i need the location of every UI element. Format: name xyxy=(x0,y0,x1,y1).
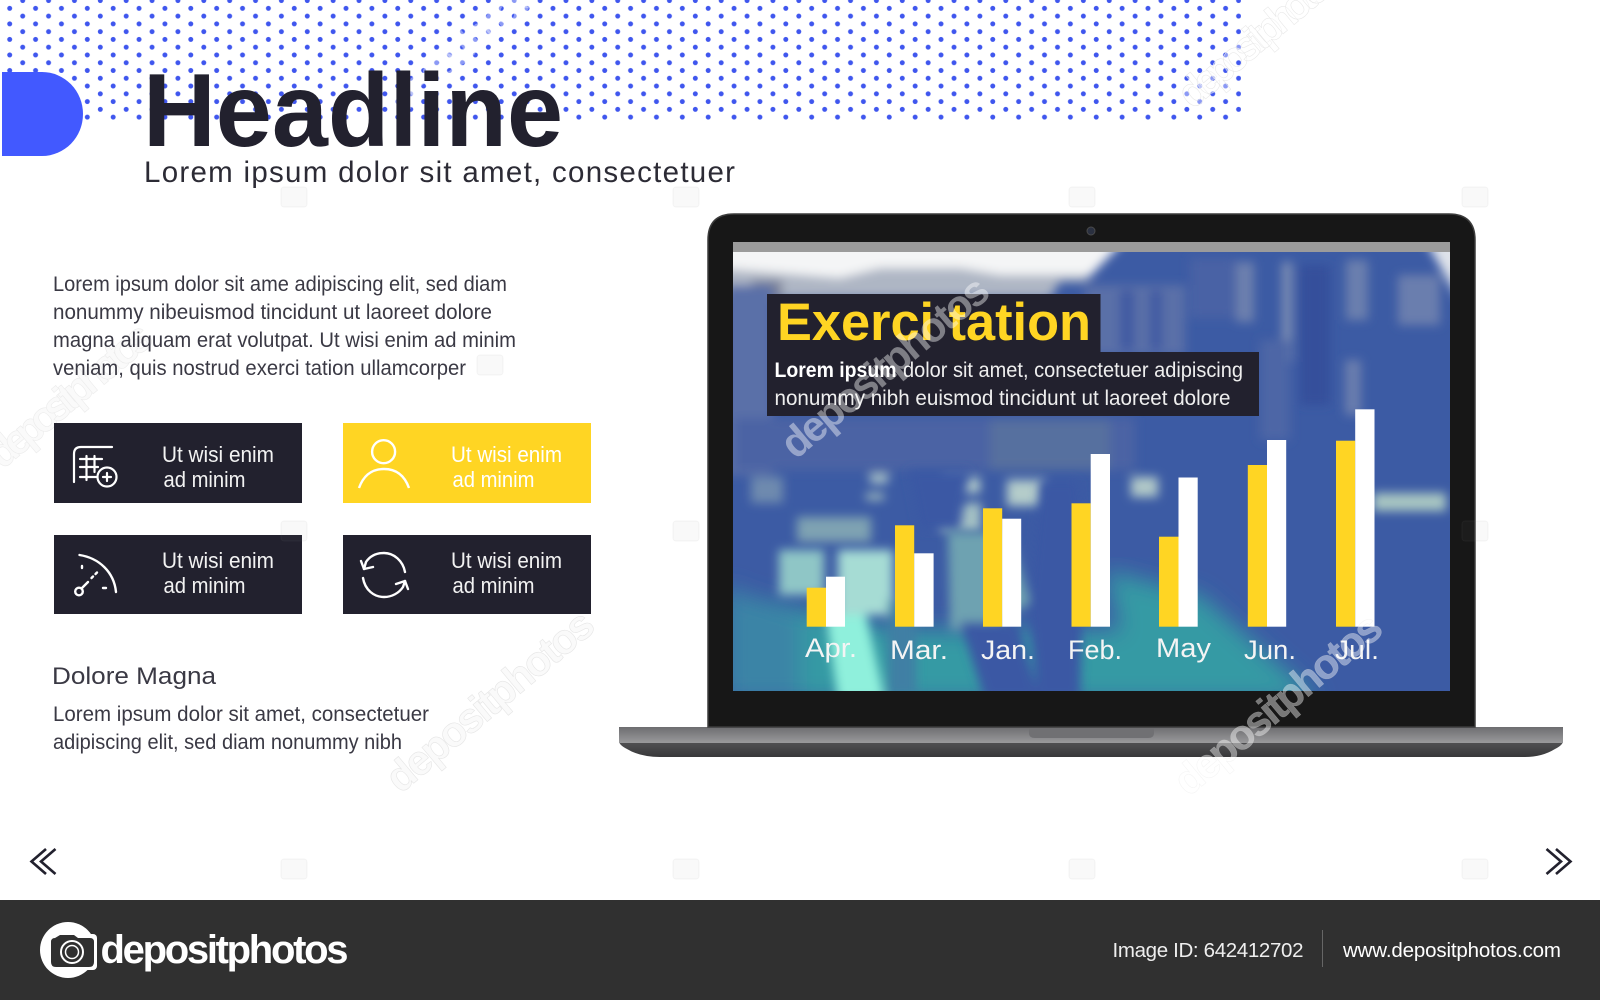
icon: circular arrows xyxy=(361,553,408,597)
button: gauge: ad minim xyxy=(164,573,246,598)
sky xyxy=(733,261,1102,294)
chart axis labels: Jun. xyxy=(1244,635,1296,665)
blue rounded tab xyxy=(2,72,83,156)
headline: Headline xyxy=(143,53,563,169)
watermark camera marks xyxy=(281,187,1488,879)
arrow: previous xyxy=(32,849,56,874)
icon: person xyxy=(359,440,409,488)
screen photo xyxy=(715,240,1465,700)
ground xyxy=(725,570,1320,700)
footer bar xyxy=(0,900,1600,1000)
section text xyxy=(53,702,429,754)
button: table add: Ut wisi enim xyxy=(162,442,274,467)
title box xyxy=(767,293,1259,416)
website: www.depositphotos.com xyxy=(1342,939,1561,962)
button: table add xyxy=(54,423,302,503)
watermarks over laptop: depositphotos xyxy=(771,266,998,467)
laptop base xyxy=(619,727,1563,757)
title box: Exerci tation xyxy=(777,293,1091,352)
chart axis labels: Jan. xyxy=(981,635,1035,665)
button: gauge: Ut wisi enim xyxy=(162,548,274,573)
intro paragraph: nonummy nibeuismod tincidunt ut laoreet dolore xyxy=(53,300,492,324)
laptop lid xyxy=(708,214,1475,727)
title box: nonummy nibh euismod tincidunt ut laoreet dolore xyxy=(774,386,1230,410)
arrow: next xyxy=(1546,849,1570,874)
button: refresh: ad minim xyxy=(452,573,534,598)
logo: depositphotos xyxy=(100,928,348,972)
mottled highlights xyxy=(751,477,783,503)
chart axis labels: Jul. xyxy=(1335,635,1379,665)
image id: Image ID: 642412702 xyxy=(1112,939,1304,962)
title box: Lorem ipsum xyxy=(774,358,896,382)
chart axis labels: Mar. xyxy=(890,635,948,665)
button: person: ad minim xyxy=(452,467,534,492)
intro paragraph: Lorem ipsum dolor sit ame adipiscing elit, sed diam xyxy=(53,272,507,296)
intro paragraph: veniam, quis nostrud exerci tation ullamcorper xyxy=(53,356,466,380)
bar chart xyxy=(805,409,1379,665)
chart axis labels xyxy=(805,633,1379,665)
subheading: Lorem ipsum dolor sit amet, consectetuer xyxy=(144,156,735,189)
button: table add: ad minim xyxy=(164,467,246,492)
browser bar xyxy=(733,242,1450,252)
icon: table with plus xyxy=(74,447,116,486)
section text: adipiscing elit, sed diam nonummy nibh xyxy=(53,730,402,754)
watermarks over laptop: depositphotos xyxy=(1164,603,1391,804)
laptop xyxy=(619,214,1563,757)
chart axis labels: Apr. xyxy=(805,633,857,663)
dot pattern band xyxy=(0,0,1241,121)
chart axis labels: May xyxy=(1156,633,1212,663)
icon: gauge xyxy=(75,555,116,595)
logo xyxy=(40,922,348,978)
section text: Lorem ipsum dolor sit amet, consectetuer xyxy=(53,702,429,726)
building facade xyxy=(725,285,773,475)
button: person xyxy=(343,423,591,503)
button: refresh xyxy=(343,535,591,614)
watermarks over laptop xyxy=(771,266,1391,804)
people silhouettes xyxy=(1028,480,1084,700)
button: gauge xyxy=(54,535,302,614)
background watermarks xyxy=(0,0,1351,801)
section heading: Dolore Magna xyxy=(52,663,217,690)
intro paragraph: magna aliquam erat volutpat. Ut wisi enim ad minim xyxy=(53,328,516,352)
background watermarks: depositphotos xyxy=(376,600,603,801)
button: person: Ut wisi enim xyxy=(451,442,562,467)
chart axis labels: Feb. xyxy=(1068,635,1122,665)
title box: dolor sit amet, consectetuer adipiscing xyxy=(903,358,1243,382)
intro paragraph xyxy=(53,272,516,380)
button: refresh: Ut wisi enim xyxy=(451,548,562,573)
